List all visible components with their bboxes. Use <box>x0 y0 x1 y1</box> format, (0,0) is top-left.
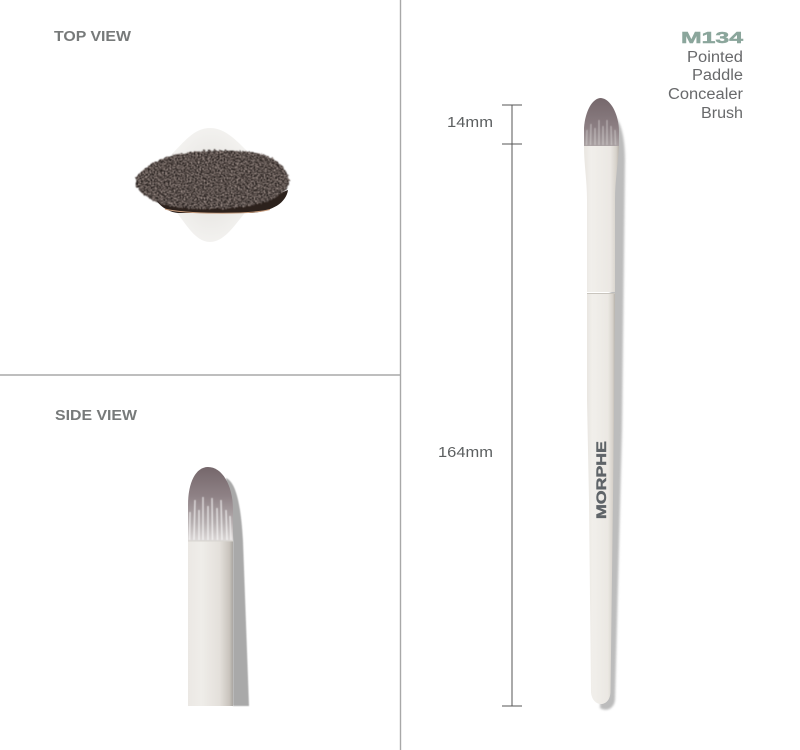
product title: Concealer <box>668 86 743 103</box>
heading: side view: SIDE VIEW <box>55 408 137 424</box>
icon: brush side view <box>188 467 249 706</box>
product title <box>668 30 743 122</box>
product title: Brush <box>701 105 743 122</box>
dimension lines <box>502 105 522 706</box>
panel dividers <box>0 0 400 750</box>
product title: Paddle <box>692 67 743 84</box>
product title: M134 <box>681 30 743 47</box>
label: bristle length: 14mm <box>447 115 493 131</box>
product title: Pointed <box>687 49 743 66</box>
icon: full brush <box>584 98 625 710</box>
heading: top view: TOP VIEW <box>54 29 131 45</box>
label: total length: 164mm <box>438 445 493 461</box>
brand mark on handle: MORPHE <box>593 441 609 519</box>
icon: brush top view <box>135 128 289 242</box>
